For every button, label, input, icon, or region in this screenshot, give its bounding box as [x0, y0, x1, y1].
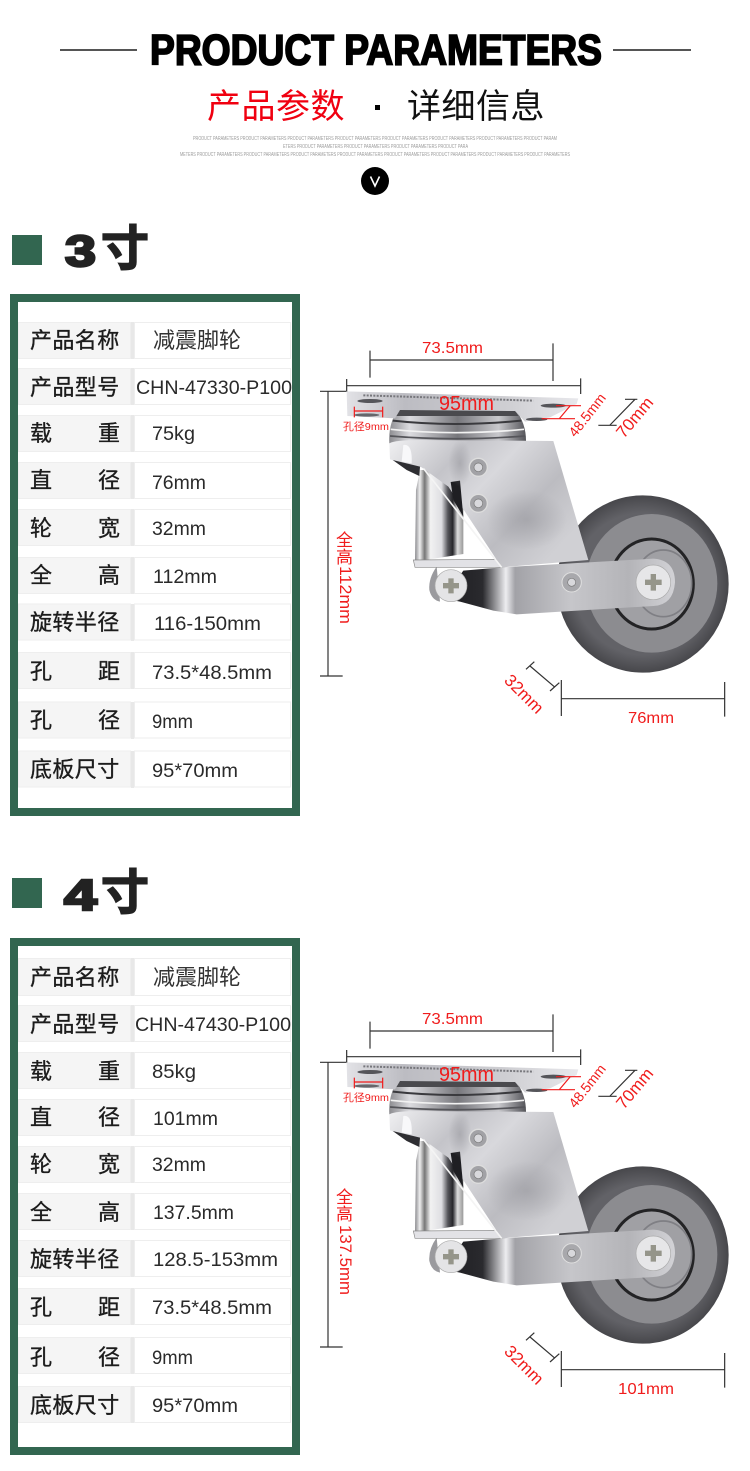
dimension labels: 48.5mm	[565, 1061, 609, 1111]
row: plate size: 底板尺寸	[30, 757, 120, 782]
heading: 3 inch: 3	[65, 227, 96, 276]
row: product name: 产品名称	[30, 328, 120, 353]
dimension labels: 全	[336, 531, 353, 550]
row: height	[18, 557, 290, 594]
dimension labels: 孔径9mm	[343, 1091, 389, 1104]
small decorative caption text	[180, 136, 571, 158]
heading: 4 inch: 4	[64, 871, 98, 920]
caster photo illustration	[347, 391, 729, 673]
row: swivel radius: 旋转半径	[30, 610, 120, 635]
row: hole spacing	[18, 1288, 290, 1325]
row: hole spacing: 孔距	[30, 1295, 120, 1320]
row: diameter: 直径	[30, 1105, 120, 1130]
row: height	[18, 1193, 290, 1230]
row: model	[18, 1005, 291, 1042]
dimension labels	[336, 340, 674, 727]
row: diameter: 101mm	[153, 1109, 218, 1130]
dimension labels: 32mm	[500, 671, 547, 718]
heading: 3 inch	[12, 223, 149, 276]
row: hole spacing: 73.5*48.5mm	[152, 663, 272, 684]
diagram: 3 inch caster with dimensions	[320, 340, 729, 727]
row: hole spacing: 孔距	[30, 659, 120, 684]
diagram: 4 inch caster with dimensions	[320, 1011, 729, 1398]
dimension labels: 112mm	[336, 566, 355, 624]
small decorative caption text: PRODUCT PARAMETERS PRODUCT PARAMETERS PRODUCT PARAMETERS PRODUCT PARAMETERS PRODUCT PARAMETERS PRODUCT PARAMETERS PRODUCT PARAMETERS PRODUCT PARAM	[193, 136, 557, 142]
row: height: 全高	[30, 1200, 120, 1225]
dimension labels: 全	[336, 1188, 353, 1207]
dimension labels: 32mm	[500, 1342, 547, 1389]
dimension lines	[320, 343, 725, 717]
panel: 4 inch spec table	[14, 942, 296, 1451]
dimension labels: 76mm	[628, 710, 674, 727]
heading: 4 inch: 寸	[101, 867, 149, 920]
row: load: 75kg	[152, 424, 195, 445]
row: plate size: 95*70mm	[152, 1396, 238, 1417]
subtitle: Chinese heading: 产品参数	[207, 88, 345, 126]
row: height: 112mm	[153, 567, 217, 588]
small decorative caption text: METERS PRODUCT PARAMETERS PRODUCT PARAMETERS PRODUCT PARAMETERS PRODUCT PARAMETERS PRODUCT PARAMETERS PRODUCT PARAMETERS PRODUCT PARAMETERS PRODUCT PARAMETERS	[180, 152, 571, 158]
dimension labels: 95mm	[439, 393, 494, 415]
row: product name: 减震脚轮	[153, 328, 241, 353]
row: model: CHN-47330-P100	[136, 378, 292, 399]
dimension labels: 137.5mm	[336, 1225, 355, 1295]
row: product name	[18, 958, 290, 996]
row: swivel radius: 128.5-153mm	[153, 1250, 278, 1271]
row: swivel radius	[18, 604, 290, 641]
row: wheel width: 轮宽	[30, 1152, 120, 1177]
row: wheel width: 32mm	[152, 1155, 206, 1176]
dimension labels	[336, 1011, 674, 1398]
title: product parameters heading: PRODUCT PARAMETERS	[150, 26, 602, 74]
dimension labels: 70mm	[612, 393, 657, 442]
row: diameter	[18, 1099, 290, 1136]
row: load	[18, 415, 290, 452]
dimension labels: 48.5mm	[565, 390, 609, 440]
row: wheel width: 32mm	[152, 519, 206, 540]
row: hole diameter: 孔径	[30, 1345, 120, 1370]
row: plate size	[18, 751, 290, 788]
row: swivel radius	[18, 1240, 290, 1277]
subtitle: Chinese heading: 详细信息	[407, 88, 545, 126]
row: hole spacing	[18, 652, 290, 689]
dimension labels: 95mm	[439, 1064, 494, 1086]
row: height: 全高	[30, 563, 120, 588]
panel: 3 inch spec table	[14, 298, 296, 812]
row: wheel width	[18, 509, 290, 546]
row: product name: 产品名称	[30, 965, 120, 990]
row: wheel width	[18, 1146, 290, 1183]
row: plate size: 95*70mm	[152, 761, 238, 782]
row: hole diameter: 9mm	[152, 712, 193, 733]
row: height: 137.5mm	[153, 1203, 234, 1224]
dimension lines	[320, 1014, 725, 1388]
small decorative caption text: ETERS PRODUCT PARAMETERS PRODUCT PARAMETERS PRODUCT PARAMETERS PRODUCT PARA	[283, 144, 469, 150]
row: hole diameter	[18, 1337, 290, 1374]
dimension labels: 73.5mm	[422, 1011, 483, 1028]
row: load: 85kg	[152, 1062, 196, 1083]
row: product name	[18, 322, 290, 359]
dimension labels: 高	[336, 1205, 353, 1224]
heading: 4 inch	[12, 867, 149, 920]
icon: down chevron circle	[361, 167, 389, 195]
row: model	[18, 368, 292, 405]
heading: 3 inch: 寸	[101, 223, 149, 276]
row: load: 载重	[30, 421, 120, 446]
dimension labels: 孔径9mm	[343, 420, 389, 433]
subtitle: Chinese heading	[207, 88, 545, 126]
row: hole diameter: 9mm	[152, 1348, 193, 1369]
row: hole spacing: 73.5*48.5mm	[152, 1298, 272, 1319]
row: plate size: 底板尺寸	[30, 1393, 120, 1418]
row: diameter: 直径	[30, 468, 120, 493]
row: model: 产品型号	[30, 375, 120, 400]
row: wheel width: 轮宽	[30, 516, 120, 541]
caster photo illustration	[347, 1062, 729, 1344]
row: swivel radius: 116-150mm	[154, 614, 261, 635]
row: diameter	[18, 462, 290, 499]
row: swivel radius: 旋转半径	[30, 1247, 120, 1272]
row: load	[18, 1052, 290, 1089]
dimension labels: 70mm	[612, 1064, 657, 1113]
dimension labels: 101mm	[618, 1381, 674, 1398]
row: plate size	[18, 1386, 290, 1423]
row: product name: 减震脚轮	[153, 965, 241, 990]
row: diameter: 76mm	[152, 473, 206, 494]
row: load: 载重	[30, 1059, 120, 1084]
row: model: CHN-47430-P100	[135, 1015, 291, 1036]
row: hole diameter	[18, 702, 290, 739]
dimension labels: 高	[336, 548, 353, 567]
row: hole diameter: 孔径	[30, 708, 120, 733]
dimension labels: 73.5mm	[422, 340, 483, 357]
row: model: 产品型号	[30, 1012, 120, 1037]
